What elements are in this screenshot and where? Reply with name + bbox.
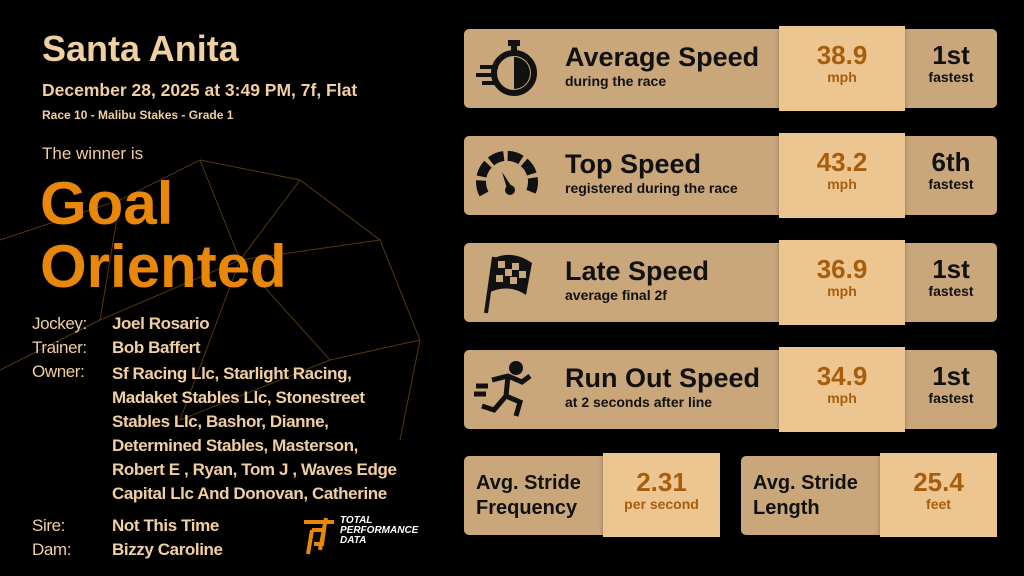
connections: Bizzy Caroline <box>112 540 223 559</box>
card: top speed <box>464 136 997 215</box>
icon: speedometer <box>476 150 538 196</box>
card: run out speed: at 2 seconds after line <box>565 394 712 410</box>
card: late speed: fastest <box>928 283 974 299</box>
card: stride length <box>741 456 997 535</box>
card: run out speed: Run Out Speed <box>565 363 760 393</box>
icon: runner <box>474 361 532 417</box>
card: late speed <box>464 243 997 322</box>
card: stride frequency: 2.31 <box>636 467 687 497</box>
logo <box>304 515 419 554</box>
connections: Jockey: <box>32 314 87 333</box>
logo: TOTAL <box>340 515 372 526</box>
card: run out speed: fastest <box>928 390 974 406</box>
logo: PERFORMANCE <box>340 525 418 536</box>
card: average speed: 1st <box>932 40 970 70</box>
race info: Race 10 - Malibu Stakes - Grade 1 <box>42 108 233 122</box>
logo: DATA <box>340 535 366 546</box>
card: top speed: mph <box>827 176 857 192</box>
connections <box>32 314 397 559</box>
icon: checkered flag <box>484 254 532 314</box>
connections: Owner: <box>32 362 84 381</box>
card: run out speed <box>464 350 997 429</box>
connections: Bob Baffert <box>112 338 200 357</box>
card: late speed: mph <box>827 283 857 299</box>
card: average speed: Average Speed <box>565 42 759 72</box>
date line: December 28, 2025 at 3:49 PM, 7f, Flat <box>42 80 357 100</box>
winner name: Oriented <box>40 233 287 300</box>
card: top speed: registered during the race <box>565 180 738 196</box>
card: stride frequency: Avg. Stride <box>476 472 581 494</box>
card: average speed: during the race <box>565 73 666 89</box>
card: top speed: fastest <box>928 176 974 192</box>
connections: Dam: <box>32 540 71 559</box>
card: late speed: 36.9 <box>817 254 867 284</box>
card: top speed: 43.2 <box>817 147 867 177</box>
connections: Sf Racing Llc, Starlight Racing, Madaket Stables Llc, Stonestreet Stables Llc, Bashor, Dianne, Determined Stables, Masterson, Robert E , Ryan, Tom J , Waves Edge Capital Llc And Donovan, Catherine <box>112 364 397 503</box>
card: top speed: 6th <box>932 147 970 177</box>
card: stride frequency <box>464 456 720 535</box>
winner name: Goal <box>40 170 173 237</box>
card: late speed: Late Speed <box>565 256 709 286</box>
connections: Not This Time <box>112 516 219 535</box>
card: top speed: Top Speed <box>565 149 701 179</box>
card: stride length: feet <box>926 496 951 512</box>
card: late speed: average final 2f <box>565 287 667 303</box>
card: late speed: 1st <box>932 254 970 284</box>
winner name <box>40 170 287 300</box>
card: average speed <box>464 29 997 108</box>
connections: Sire: <box>32 516 65 535</box>
connections: Trainer: <box>32 338 87 357</box>
card: average speed: 38.9 <box>817 40 867 70</box>
winner label: The winner is <box>42 144 143 163</box>
card: run out speed: 34.9 <box>817 361 867 391</box>
card: stride length: 25.4 <box>913 467 964 497</box>
card: stride frequency: Frequency <box>476 497 577 519</box>
connections: Joel Rosario <box>112 314 209 333</box>
card: stride length: Avg. Stride <box>753 472 858 494</box>
card: run out speed: mph <box>827 390 857 406</box>
card: average speed: fastest <box>928 69 974 85</box>
icon: stopwatch <box>476 40 537 96</box>
card: stride length: Length <box>753 497 820 519</box>
title: Santa Anita <box>42 28 239 69</box>
card: stride frequency: per second <box>624 496 699 512</box>
background horse network <box>0 160 420 440</box>
card: average speed: mph <box>827 69 857 85</box>
card: run out speed: 1st <box>932 361 970 391</box>
